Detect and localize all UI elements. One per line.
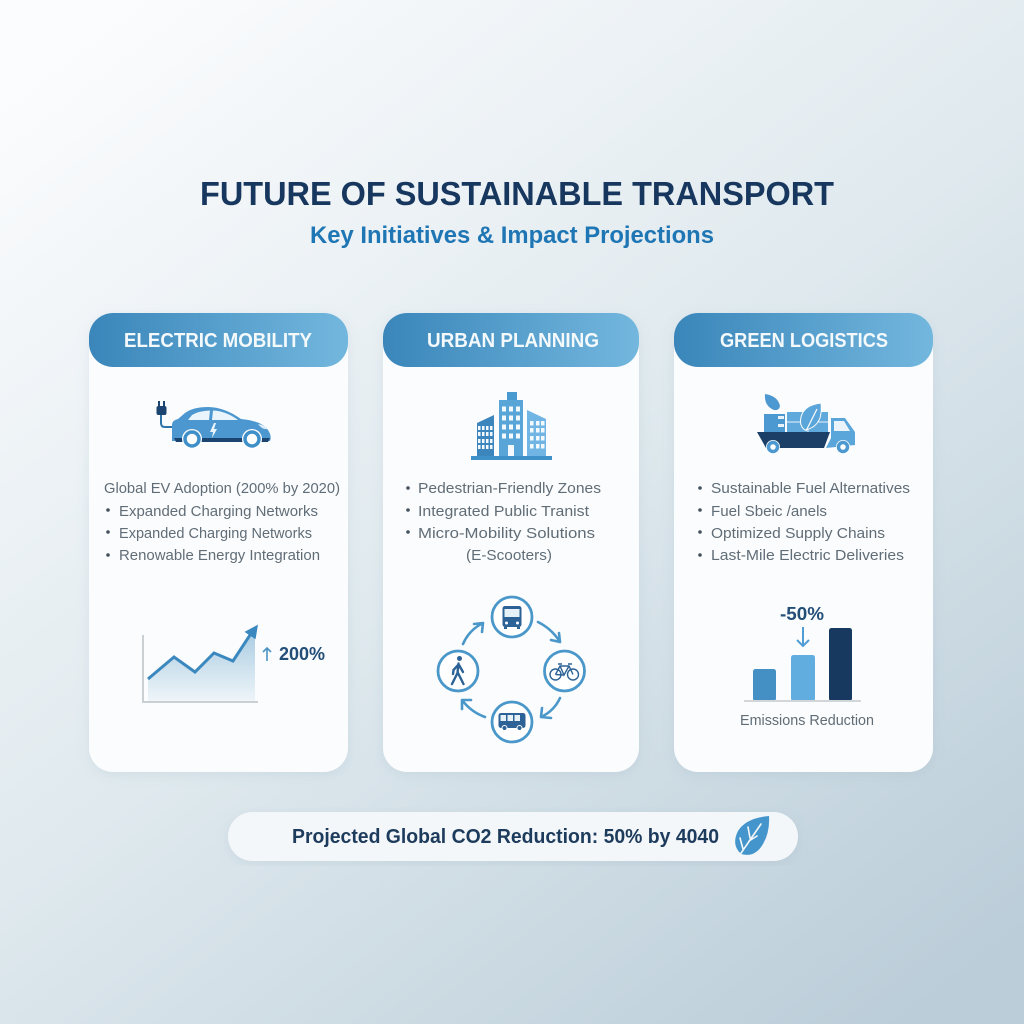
callout: projected CO2 reduction: Projected Global CO2 Reduction: 50% by 4040 bbox=[292, 826, 719, 848]
text block: logistics bullets bbox=[698, 480, 910, 564]
icon: bicycle bbox=[544, 651, 584, 691]
text block: logistics bullets: Fuel Sbeic /anels bbox=[711, 503, 827, 520]
text block: urban bullets: (E-Scooters) bbox=[466, 547, 552, 564]
text block: EV bullets bbox=[104, 480, 340, 564]
line chart: EV growth bbox=[143, 626, 325, 702]
subtitle: Key Initiatives & Impact Projections bbox=[310, 222, 714, 249]
icon: delivery truck with leaves bbox=[757, 394, 855, 454]
diagram: mobility cycle bbox=[438, 597, 584, 742]
callout: projected CO2 reduction bbox=[228, 812, 798, 861]
text block: logistics bullets: Sustainable Fuel Alternatives bbox=[711, 480, 910, 497]
panel header: urban planning: URBAN PLANNING bbox=[427, 330, 599, 352]
icon: top bus bbox=[492, 597, 532, 637]
icon: lower bus bbox=[492, 702, 532, 742]
text block: urban bullets: Integrated Public Tranist bbox=[418, 503, 590, 520]
arrows bbox=[462, 622, 560, 718]
text block: urban bullets: Pedestrian-Friendly Zones bbox=[418, 480, 601, 497]
icon: electric car with plug bbox=[156, 401, 271, 449]
panel header: green logistics: GREEN LOGISTICS bbox=[720, 330, 888, 352]
icon: pedestrian bbox=[438, 651, 478, 691]
panel header: electric mobility bbox=[89, 313, 348, 367]
panel header: urban planning bbox=[383, 313, 639, 367]
text block: logistics bullets: Last-Mile Electric Deliveries bbox=[711, 547, 904, 564]
label: minus 50 percent: -50% bbox=[780, 604, 824, 624]
label: 200 percent: 200% bbox=[279, 644, 325, 664]
panel: electric mobility bbox=[89, 313, 348, 772]
title: FUTURE OF SUSTAINABLE TRANSPORT bbox=[200, 175, 834, 212]
text block: urban bullets bbox=[406, 480, 601, 564]
panel header: green logistics bbox=[674, 313, 933, 367]
panel header: electric mobility: ELECTRIC MOBILITY bbox=[124, 330, 313, 352]
bar chart: emissions reduction bbox=[740, 604, 874, 729]
icon: leaf bbox=[735, 816, 769, 859]
text block: urban bullets: Micro-Mobility Solutions bbox=[418, 525, 595, 542]
icon: city buildings bbox=[471, 392, 552, 460]
label: emissions reduction: Emissions Reduction bbox=[740, 713, 874, 729]
panel: urban planning bbox=[383, 313, 639, 772]
text block: logistics bullets: Optimized Supply Chains bbox=[711, 525, 885, 542]
arrow: down bbox=[797, 627, 809, 646]
text block: EV bullets: Expanded Charging Networks bbox=[119, 503, 318, 520]
text block: EV bullets: Global EV Adoption (200% by 2020) bbox=[104, 480, 340, 497]
text block: EV bullets: Expanded Charging Networks bbox=[119, 525, 312, 542]
text block: EV bullets: Renowable Energy Integration bbox=[119, 547, 320, 564]
panel: green logistics bbox=[674, 313, 933, 772]
